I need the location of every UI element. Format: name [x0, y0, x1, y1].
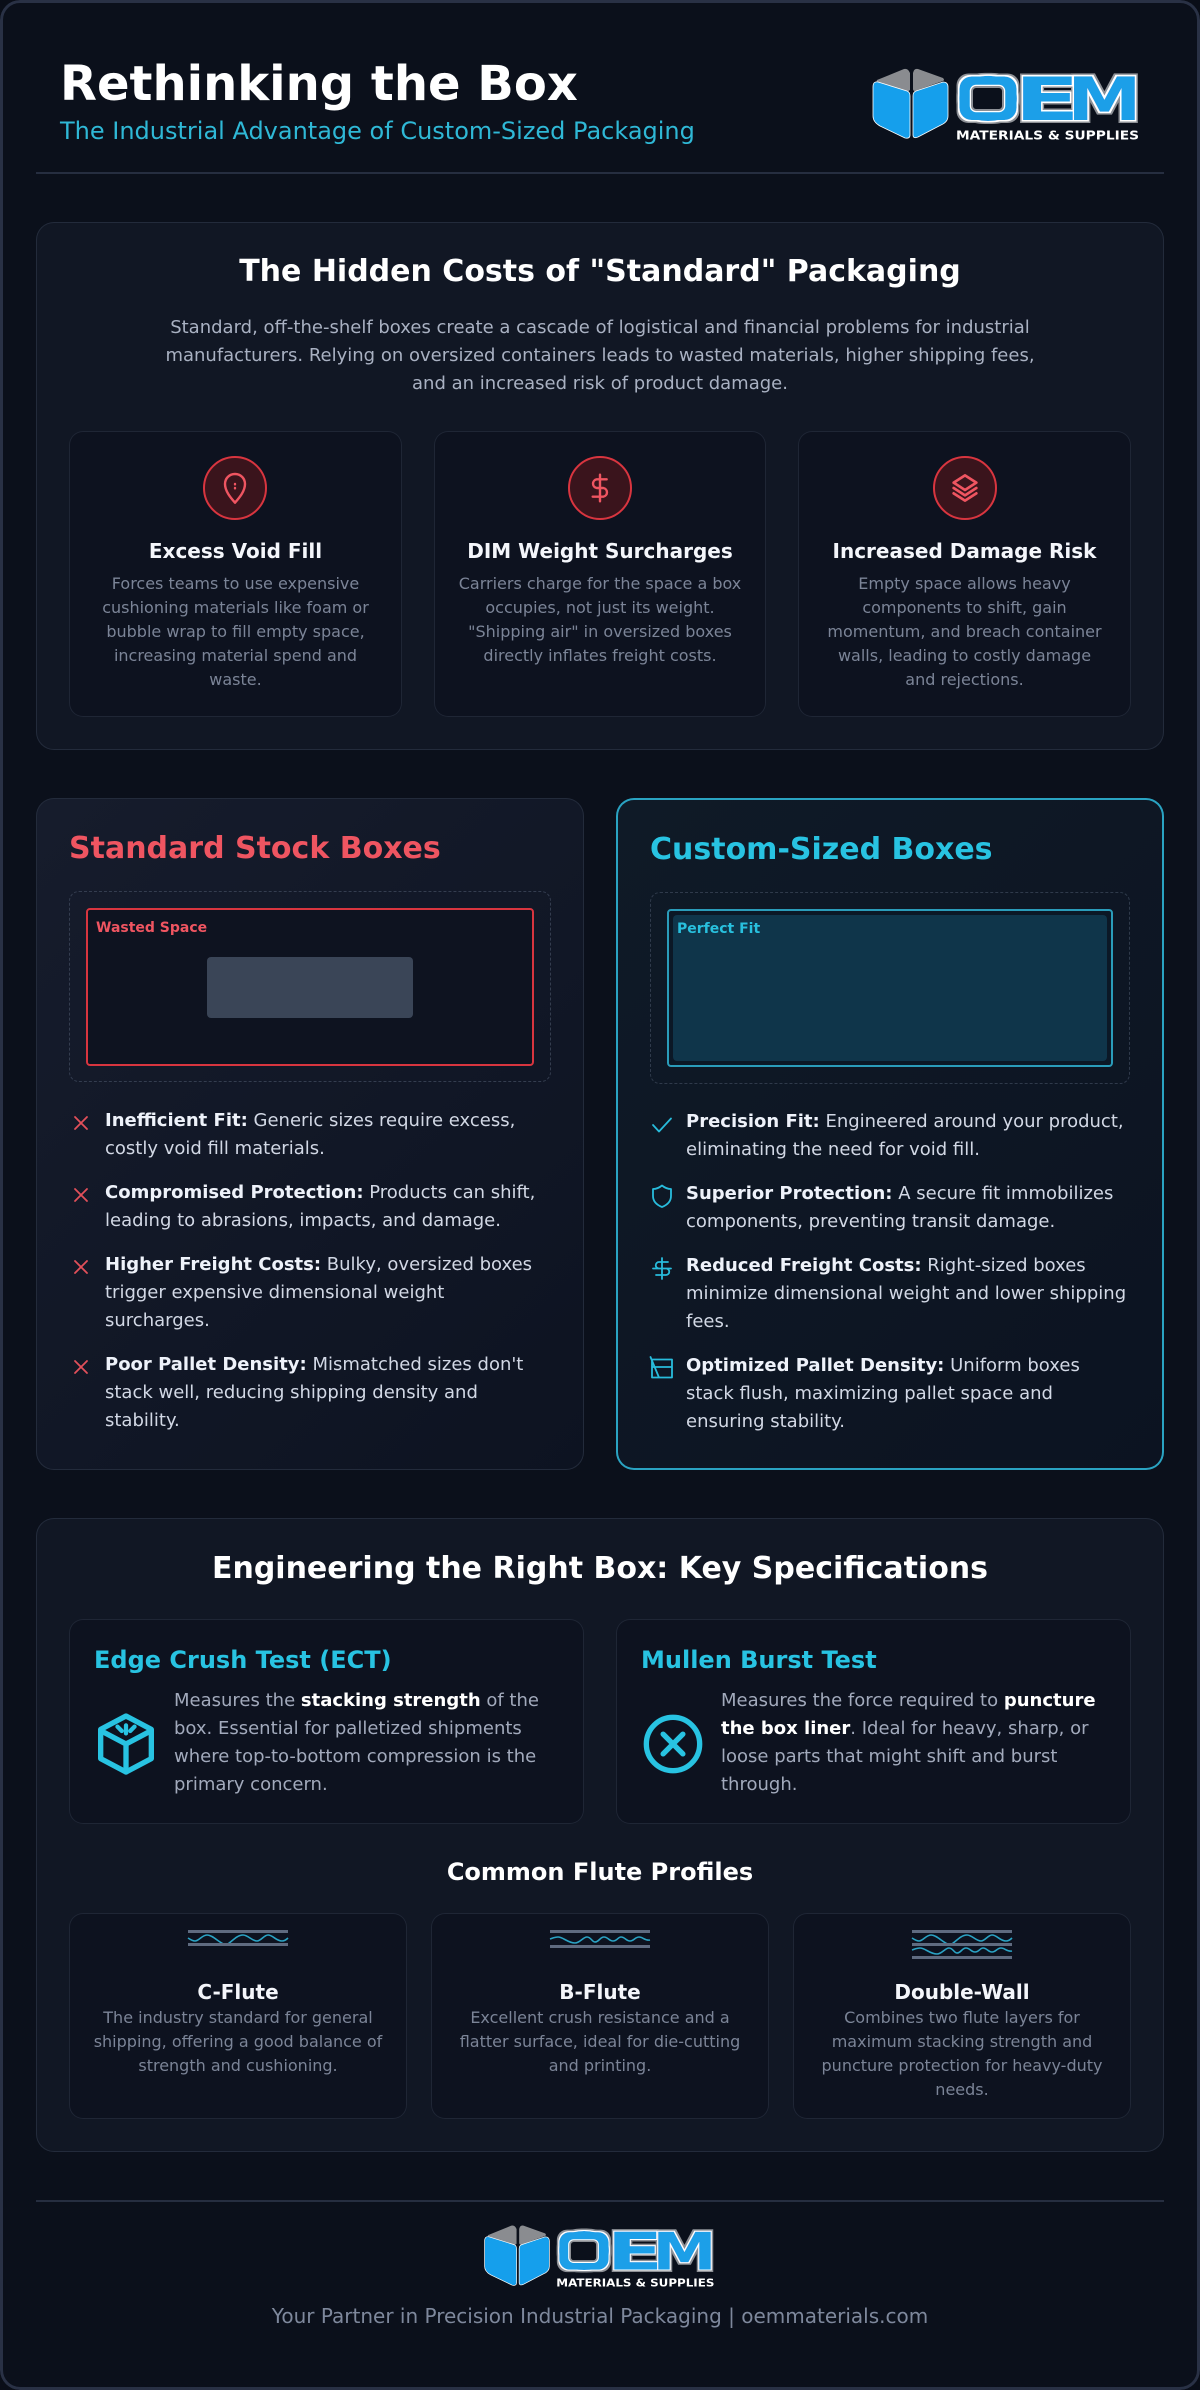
card text: through.: [721, 1774, 797, 1795]
card heading: B-Flute: [559, 1980, 641, 2004]
heading: hidden costs: The Hidden Costs of "Standard" Packaging: [239, 254, 961, 289]
card: excess void fill: [69, 431, 402, 717]
intro paragraph: [165, 317, 1035, 394]
heading: standard stock boxes: Standard Stock Boxes: [69, 831, 441, 866]
card text: cushioning materials like foam or: [102, 598, 369, 617]
label: wasted space: Wasted Space: [96, 920, 207, 936]
card text: "Shipping air" in oversized boxes: [468, 622, 732, 641]
heading: key specifications: Engineering the Right Box: Key Specifications: [212, 1551, 988, 1586]
card text: increasing material spend and: [114, 646, 357, 665]
item: reduced freight costs: [652, 1255, 1126, 1332]
footer logo: O: [556, 2223, 613, 2283]
logo: OEM Materials & Supplies: M: [1067, 65, 1142, 135]
card text: [460, 2008, 740, 2075]
list: custom benefits: [650, 1111, 1126, 1432]
card heading: Mullen Burst Test: [641, 1646, 877, 1674]
card text: primary concern.: [174, 1774, 328, 1795]
icon: double-wall cross-section: [912, 1930, 1012, 1959]
item: higher freight costs: surcharges.: [105, 1310, 210, 1331]
card heading: Double-Wall: [894, 1980, 1030, 2004]
oversized box: [86, 908, 534, 1066]
item: optimized pallet density: [650, 1355, 1080, 1432]
heading: custom-sized boxes: Custom-Sized Boxes: [650, 832, 993, 867]
card: B-flute: [431, 1913, 769, 2119]
footer logo: [484, 2222, 717, 2290]
item: reduced freight costs: minimize dimensional weight and lower shipping: [686, 1283, 1126, 1304]
card text: Forces teams to use expensive: [112, 574, 359, 593]
card text: occupies, not just its weight.: [485, 598, 715, 617]
item: precision fit: Precision Fit: Engineered around your product,: [686, 1111, 1124, 1132]
item: optimized pallet density: ensuring stability.: [686, 1411, 845, 1432]
logo: OEM Materials & Supplies: E: [1014, 65, 1080, 134]
item: optimized pallet density: stack flush, maximizing pallet space and: [686, 1383, 1053, 1404]
item: compromised protection: Compromised Protection: Products can shift,: [105, 1182, 535, 1203]
item: inefficient fit: [74, 1110, 515, 1159]
item: superior protection: components, preventing transit damage.: [686, 1211, 1055, 1232]
item: inefficient fit: costly void fill materials.: [105, 1138, 325, 1159]
item: higher freight costs: Higher Freight Costs: Bulky, oversized boxes: [105, 1254, 532, 1275]
card heading: Excess Void Fill: [149, 539, 322, 563]
intro paragraph: manufacturers. Relying on oversized containers leads to wasted materials, higher shipping fees,: [165, 345, 1035, 366]
item: precision fit: [652, 1111, 1124, 1160]
card heading: C-Flute: [197, 1980, 279, 2004]
card text: The industry standard for general: [103, 2008, 373, 2027]
item: precision fit: eliminating the need for void fill.: [686, 1139, 980, 1160]
card text: Carriers charge for the space a box: [459, 574, 741, 593]
card text: Measures the stacking strength of the: [174, 1690, 539, 1711]
item: reduced freight costs: Reduced Freight Costs: Right-sized boxes: [686, 1255, 1086, 1276]
icon: dollar: [568, 456, 632, 520]
icon: layers: [933, 456, 997, 520]
panel: custom-sized boxes: [616, 798, 1164, 1470]
header: [60, 56, 1142, 145]
item: poor pallet density: stack well, reducing shipping density and: [105, 1382, 478, 1403]
item: reduced freight costs: fees.: [686, 1311, 730, 1332]
card text: walls, leading to costly damage: [838, 646, 1091, 665]
card text: puncture protection for heavy-duty: [822, 2056, 1102, 2075]
product: [207, 957, 413, 1018]
card text: bubble wrap to fill empty space,: [106, 622, 365, 641]
card text: shipping, offering a good balance of: [94, 2032, 382, 2051]
fitted box: [667, 909, 1113, 1067]
item: compromised protection: [74, 1182, 535, 1231]
item: optimized pallet density: Optimized Pallet Density: Uniform boxes: [686, 1355, 1080, 1376]
list: standard problems: [74, 1110, 535, 1431]
card text: Measures the force required to puncture: [721, 1690, 1096, 1711]
logo: OEM Materials & Supplies: MATERIALS & SUPPLIES: [956, 128, 1139, 142]
item: inefficient fit: Inefficient Fit: Generic sizes require excess,: [105, 1110, 515, 1131]
footer logo: M: [653, 2222, 717, 2282]
logo: OEM Materials & Supplies: O: [956, 65, 1021, 135]
card text: maximum stacking strength and: [832, 2032, 1092, 2051]
card text: loose parts that might shift and burst: [721, 1746, 1057, 1767]
item: superior protection: Superior Protection: A secure fit immobilizes: [686, 1183, 1113, 1204]
card: edge crush test: [69, 1619, 584, 1824]
card text: Empty space allows heavy: [858, 574, 1071, 593]
footer text: Your Partner in Precision Industrial Packaging | oemmaterials.com: [272, 2304, 928, 2328]
card: DIM weight surcharges: [434, 431, 766, 717]
item: compromised protection: leading to abrasions, impacts, and damage.: [105, 1210, 501, 1231]
card text: components to shift, gain: [862, 598, 1067, 617]
item: poor pallet density: [74, 1354, 523, 1431]
subtitle: The Industrial Advantage of Custom-Sized Packaging: [60, 117, 695, 145]
item: poor pallet density: stability.: [105, 1410, 180, 1431]
intro paragraph: Standard, off-the-shelf boxes create a cascade of logistical and financial problems for industrial: [170, 317, 1030, 338]
card text: directly inflates freight costs.: [483, 646, 717, 665]
card text: [721, 1690, 1096, 1795]
heading: common flute profiles: Common Flute Profiles: [447, 1858, 753, 1886]
card heading: Edge Crush Test (ECT): [94, 1646, 392, 1674]
icon: map pin: [203, 456, 267, 520]
intro paragraph: and an increased risk of product damage.: [412, 373, 788, 394]
card: mullen burst test: [616, 1619, 1131, 1824]
card text: waste.: [209, 670, 262, 689]
card: C-flute: [69, 1913, 407, 2119]
card text: flatter surface, ideal for die-cutting: [460, 2032, 740, 2051]
card text: needs.: [935, 2080, 989, 2099]
item: poor pallet density: Poor Pallet Density: Mismatched sizes don't: [105, 1354, 523, 1375]
card: increased damage risk: [798, 431, 1131, 717]
panel: hidden costs: [36, 222, 1164, 750]
card text: strength and cushioning.: [138, 2056, 338, 2075]
card text: momentum, and breach container: [827, 622, 1102, 641]
label: perfect fit: Perfect Fit: [677, 921, 760, 937]
title: Rethinking the Box: [60, 56, 578, 112]
card text: Excellent crush resistance and a: [470, 2008, 730, 2027]
icon: x in circle: [644, 1714, 702, 1774]
card text: [174, 1690, 539, 1795]
card text: [459, 574, 741, 665]
card text: [822, 2008, 1102, 2099]
footer: [272, 2222, 928, 2328]
diagram: wasted space: [69, 891, 551, 1082]
card heading: DIM Weight Surcharges: [467, 539, 733, 563]
card text: [827, 574, 1102, 689]
card text: the box liner. Ideal for heavy, sharp, or: [721, 1718, 1089, 1739]
diagram: perfect fit: [650, 892, 1130, 1084]
card text: Combines two flute layers for: [844, 2008, 1080, 2027]
card: double-wall: [793, 1913, 1131, 2119]
card text: and rejections.: [905, 670, 1024, 689]
logo: OEM Materials & Supplies: [872, 65, 1142, 142]
icon: C-flute cross-section: [188, 1930, 288, 1946]
icon: B-flute cross-section: [550, 1930, 650, 1948]
panel: standard stock boxes: [36, 798, 584, 1470]
item: superior protection: [652, 1183, 1113, 1232]
footer logo: E: [607, 2223, 664, 2283]
card text: and printing.: [549, 2056, 651, 2075]
item: higher freight costs: [74, 1254, 532, 1331]
card text: [102, 574, 369, 689]
card text: [94, 2008, 383, 2075]
panel: key specifications: [36, 1518, 1164, 2152]
card text: where top-to-bottom compression is the: [174, 1746, 536, 1767]
footer logo: MATERIALS & SUPPLIES: [557, 2277, 715, 2290]
product: [673, 915, 1107, 1061]
icon: cube: [98, 1713, 154, 1775]
card text: box. Essential for palletized shipments: [174, 1718, 522, 1739]
item: higher freight costs: trigger expensive dimensional weight: [105, 1282, 444, 1303]
card heading: Increased Damage Risk: [833, 539, 1096, 563]
